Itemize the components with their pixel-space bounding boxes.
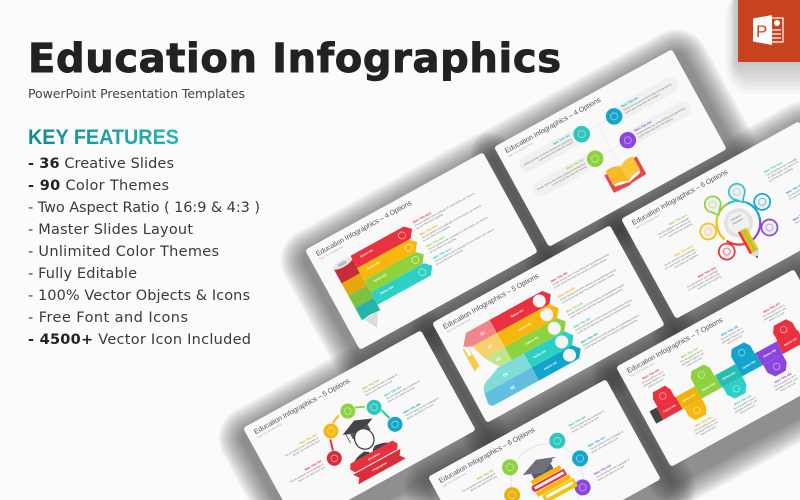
option texts: You are going to use a passage of Lorem Ipsum, you need to [414,192,476,227]
option texts: Simply dummy text of the printing and typesetting [623,83,673,112]
feature list: - Fully Editable [28,266,137,282]
arrow bars [490,288,585,387]
option texts: of Lorem Ipsum, you need to be [688,272,721,292]
option texts: Ipsum, you need to be sure [572,416,600,434]
center hub: Education [730,214,742,222]
option texts: Main Title #02 [552,133,571,146]
option texts: be sure there isn't anything [429,237,457,254]
option texts: passage of Ipsum, you [721,330,745,345]
slide: 4 options book: Type Your Subtitle Here [507,141,534,158]
feature list: - 100% Vector Objects & Icons [28,288,250,304]
graduate head silhouette [453,313,539,407]
slide: 7 options strip: Type Your Subtitle Here [629,361,656,378]
slide: 6 options books [428,379,661,500]
subtitle: PowerPoint Presentation Templates [28,86,245,101]
option texts: need to be sure [686,356,703,368]
option circles [570,105,639,170]
option texts: You are going to use a passage of [570,410,605,431]
option texts: Main Title #02 [557,286,576,299]
option texts: Main Title #04 [384,385,402,398]
option texts: Simply dummy text of the printing and typesetting [523,137,573,167]
option texts: Main Title Here [425,235,446,248]
option texts: need to be sure [780,381,797,393]
option texts: passage of Ipsum, you [734,399,758,414]
pencil banner chart: Option #02 [366,260,381,271]
center hub [719,203,758,243]
icon: graduate with ribbon: Education [367,451,381,461]
arrow bars: Option #01 [510,308,525,319]
option texts: Lorem Ipsum has been the industry's standard dummy [584,318,639,350]
icon: graduate with ribbon: Infographics [371,461,388,472]
option texts: be sure there isn't anything [423,225,451,242]
option texts: Main Title #07 [762,301,781,314]
option texts: You are going to use a [680,349,703,364]
option texts: need to be sure [739,404,757,415]
feature list: - 90 Color Themes [28,178,169,194]
slide: 5 options graduate person: Type Your Subtitle Here [256,422,283,439]
option texts: You are going to use a passage of Lorem Ipsum, you need to [421,204,482,240]
option texts: Main Title #06 [774,371,793,384]
option texts [458,402,639,500]
option texts: Simply dummy text of the printing and typesetting industry. [582,314,640,348]
option texts: Lorem Ipsum has been the industry's standard dummy [569,288,624,320]
icon: books with cap [519,448,578,500]
option texts [639,300,800,450]
slide: 4 options pencil [305,152,538,350]
option texts: Main Title #03 [361,378,380,391]
option texts: Main Title #01 [304,459,323,472]
option texts: Main Title #03 [565,301,584,314]
option texts: You are going to use a passage of [284,437,319,458]
option texts: You are going to use a passage [663,248,696,267]
option texts: Main Title #04 [593,463,612,476]
slide: 6 options pencil: Type Your Subtitle Here [634,213,661,230]
option texts: Simply dummy text of the printing and typesetting industry. [552,253,610,286]
option texts: Lorem Ipsum has been the industry [624,93,661,115]
option texts: Ipsum, you need to be sure [591,437,619,454]
option texts: need to be sure [726,334,744,346]
slide: 4 options book [494,49,727,247]
icon: PowerPoint badge: P [756,22,767,41]
option texts: Simply dummy text of the printing and typesetting industry. [575,298,633,332]
option texts: Ipsum, you need to be sure [365,380,393,397]
option texts [521,78,688,194]
option texts: passage of Ipsum, you [775,377,799,392]
option texts: Main Title #02 [299,433,318,445]
option texts: of Lorem Ipsum, you need to be [767,160,800,180]
option texts [547,249,645,350]
option texts: You are going to use a passage of [386,380,421,401]
pencil banner chart [331,223,446,333]
arrow bars: Option #03 [525,335,540,346]
slide: 4 options pencil: Type Your Subtitle Here [318,244,345,261]
option texts: You are going to use a passage of [595,458,630,479]
heading: key features: KEY FEATURES [28,126,179,149]
slide: 6 options books: Education Infographics – 6 Options [438,426,537,485]
icon: rainbow pencil [738,228,762,260]
option texts: Main Title Here [412,211,432,224]
option texts: sure there isn't anything [769,167,794,183]
slide: 5 options graduate person [243,330,476,500]
option texts: Main Title #05 [580,332,599,344]
strip segments: Option #03 [701,381,716,392]
option texts: Ipsum, you need to be sure [406,403,435,420]
option texts: Simply dummy text of the printing and typesetting [636,107,686,136]
slide: 5 options graduate head: Education Infographics – 5 Options [442,272,541,331]
strip segments: Option #01 [662,403,677,414]
option texts: Ipsum, you need to be sure [387,386,416,404]
option texts [412,188,497,266]
hexagon tabs [650,317,800,433]
option texts: You are going to use a passage of [290,463,324,484]
option texts: passage of Ipsum, you [681,352,705,367]
slide: 4 options book: Education Infographics – 4 Options [504,96,603,155]
slide: 6 options pencil [621,121,800,319]
option texts: You are going to use a passage of [589,430,624,451]
option texts: Ipsum, you need to be sure [470,475,498,492]
option texts: Main Title #05 [720,324,739,337]
option texts: You are going to use a passage of [363,373,398,394]
option texts: need to be sure [700,425,717,437]
option texts: You are going to use a [773,374,797,389]
option circles [489,424,604,500]
option texts: Ipsum, you need to be sure [292,439,321,457]
option texts: Ipsum, you need to be sure [298,466,326,483]
option texts: passage of Ipsum, you [695,421,719,436]
slide: 6 options pencil: Education Infographics – 6 Options [631,168,730,227]
option texts: Main Title Here [674,244,694,257]
feature list: - 36 Creative Slides [28,156,174,172]
radial ring [709,193,768,253]
center hub: Infographic [732,217,744,226]
slide: 5 options graduate person: Education Infographics – 5 Options [253,377,352,436]
option texts: Lorem Ipsum has been the industry [638,117,674,139]
option texts: passage of Ipsum, you [643,373,667,388]
option texts: You are going to use a passage [686,269,719,289]
slide: 5 options graduate head: Type Your Subtitle Here [445,317,472,334]
option circles [307,384,405,468]
option texts: Main Title Here [419,223,439,237]
option texts: You are going to use a passage [765,157,798,177]
option texts: Main Title #03 [566,158,584,170]
option texts: sure there isn't anything [674,253,699,269]
option pins [687,172,786,266]
option texts: Main Title #05 [403,402,421,415]
feature list: - Two Aspect Ratio ( 16:9 & 4:3 ) [28,200,260,216]
option texts: of Lorem Ipsum, you need to be [665,251,698,270]
graduate head silhouette: 05 [509,384,516,391]
option pills [516,75,695,199]
option texts: Simply dummy text of the printing and typesetting industry. [567,283,626,317]
option texts: Main Title #01 [550,271,569,283]
option texts: Main Title #01 [641,368,660,380]
pencil banner chart: Option #01 [359,248,374,259]
slide: 5 options graduate head [432,225,665,423]
option texts: Main Title #04 [733,394,752,406]
title: Education Infographics [28,36,561,82]
option texts: You are going to use a [720,327,744,342]
option texts: You are going to use a passage [658,217,690,236]
slide: 4 options pencil: Education Infographics – 4 Options [315,199,414,258]
pencil banner chart: Option #03 [373,272,388,283]
arc connectors [319,395,390,450]
option texts [646,149,800,300]
option texts: Main Title Here [432,247,452,260]
option texts: need to be sure [768,311,786,322]
option texts: Main Title #02 [568,415,587,428]
option texts: You are going to use a passage of [462,472,496,493]
option texts: Main Title #01 [476,468,495,481]
feature list: - Unlimited Color Themes [28,244,219,260]
option texts: You are going to use a passage of [405,397,440,418]
option texts: Main Title #04 [634,120,652,133]
option texts: You are going to use a passage of Lorem Ipsum, you need to [434,228,495,263]
option texts: Lorem Ipsum has been the industry's standard dummy [576,303,631,335]
option texts: Main Title Here [763,160,783,174]
graduate head silhouette: 03 [495,356,502,363]
option texts: Simply dummy text of the printing and typesetting industry. [559,268,618,302]
feature list [28,156,260,348]
option texts: Lorem Ipsum has been the industry [538,140,575,162]
option texts: You are going to use a [641,370,665,385]
option texts: Simply dummy text of the printing and typesetting [537,162,587,191]
graduate head silhouette: 04 [502,371,509,378]
icon: PowerPoint badge [738,0,800,62]
strip segments [650,330,800,424]
slide: 7 options strip [616,269,800,467]
strip segments: Option #05 [742,359,757,370]
graduate head silhouette: 01 [479,330,487,337]
option texts: You are going to use a [693,418,717,433]
slide: 6 options books: Type Your Subtitle Here [441,471,468,488]
option texts: Lorem Ipsum has been the industry's standard dummy [561,273,616,305]
option texts: You are going to use a passage of Lorem Ipsum, you need to [428,216,489,251]
icon: graduate with ribbon [330,408,406,484]
option texts: Lorem Ipsum has been the industry's standard dummy [554,257,608,289]
option texts: be sure there isn't anything [416,213,444,230]
option texts: Main Title #03 [680,346,699,359]
option texts: Main Title Here [668,213,688,226]
option texts: sure there isn't anything [668,222,693,238]
option texts: Main Title Here [697,265,717,279]
option texts: Ipsum, you need to be sure [597,464,626,482]
option texts: need to be sure [648,378,665,389]
graduate head silhouette: 02 [487,343,494,350]
icon: open book [603,154,647,194]
feature list: - Master Slides Layout [28,222,193,238]
option texts: Main Title #01 [620,96,639,108]
strip segments: Option #07 [783,336,798,347]
arrow bars: Option #04 [532,349,547,359]
strip segments: Option #04 [721,370,736,381]
option texts: of Lorem Ipsum, you need to be [659,219,692,239]
option texts: Main Title #04 [573,316,591,329]
feature list: - Free Font and Icons [28,310,188,326]
option texts: passage of Ipsum, you [763,306,787,321]
pencil banner chart: Option #04 [379,285,394,295]
slide: 7 options strip: Education Infographics – 7 Options [626,316,725,375]
option texts: Main Title #02 [694,415,713,428]
arrow bars: Option #05 [543,360,558,371]
feature list: - 4500+ Vector Icon Included [28,332,251,348]
option texts: Main Title #03 [587,435,606,448]
arrow bars: Option #02 [517,321,532,332]
option texts: be sure there isn't anything [436,249,464,266]
option texts: sure there isn't anything [697,275,722,291]
option texts: You are going to use a [762,304,786,318]
option texts: Lorem Ipsum has been the industry [552,165,588,187]
option texts: You are going to use a [733,396,757,411]
option texts [267,357,442,487]
strip segments: Option #06 [762,348,777,359]
strip segments: Option #02 [682,392,696,403]
